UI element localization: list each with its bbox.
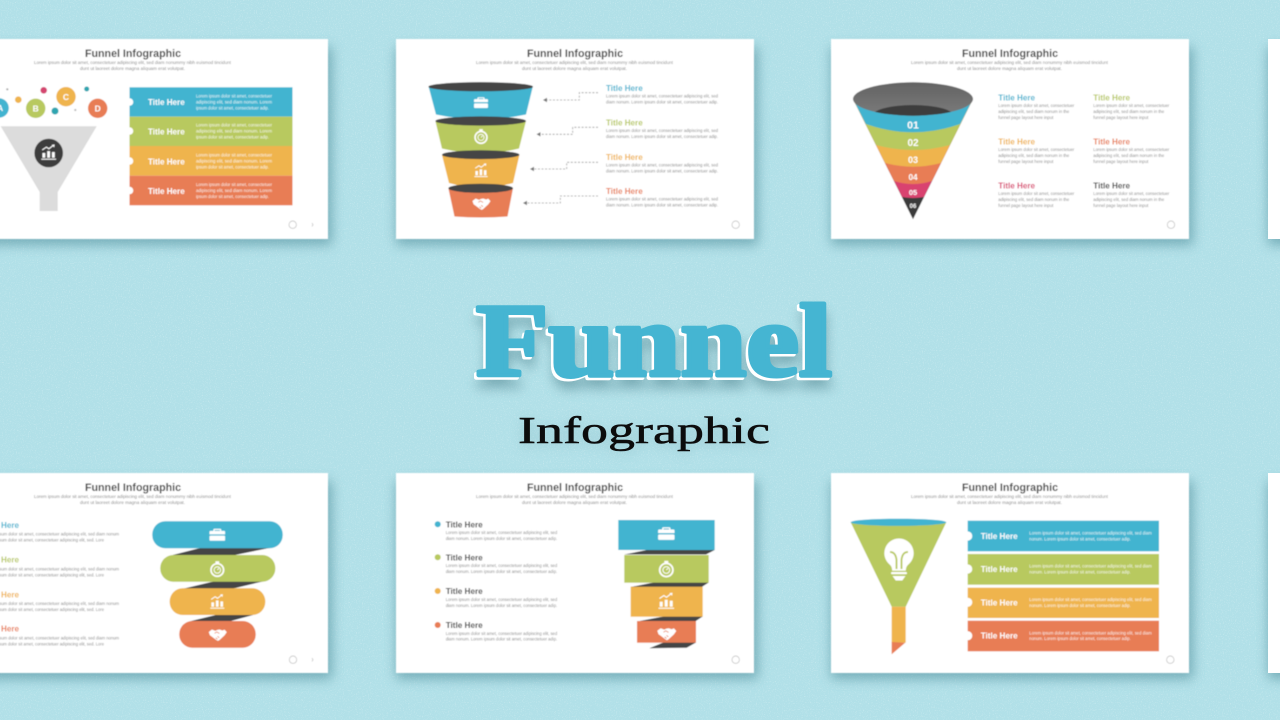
panel: slide 2 stacked funnel with arrows: Lorem ipsum dolor sit amet, consectetuer adipiscing elit, sed diam nonummy nibh euismod tincidunt — [476, 60, 674, 65]
bands: Lorem ipsum dolor sit amet, consectetuer — [196, 122, 273, 128]
letter balls: D — [95, 104, 101, 114]
bands: Lorem ipsum dolor sit amet, consectetuer adipiscing elit, sed diam — [1029, 630, 1152, 636]
bands: Title Here — [981, 564, 1018, 574]
text grid: adipiscing elit, sed diam nonum in the — [1093, 197, 1165, 202]
text grid: funnel page layout here input — [998, 115, 1054, 120]
icon: handshake — [209, 629, 227, 641]
text grid: funnel page layout here input — [998, 203, 1054, 208]
cone: 02 — [907, 138, 919, 149]
funnel segments — [428, 82, 533, 217]
icon: handshake — [657, 628, 676, 640]
bands: adipiscing elit, sed diam nonum. Lorem — [196, 158, 272, 164]
icon: chart in dark circle — [34, 139, 63, 167]
icon: briefcase — [210, 529, 225, 541]
panel: slide 4 pill funnel — [0, 473, 328, 673]
text rows: Title Here — [606, 118, 643, 128]
bands: Lorem ipsum dolor sit amet, consectetuer — [196, 94, 273, 98]
panel: slide 1 funnel with letter balls: Lorem ipsum dolor sit amet, consectetuer adipiscing elit, sed diam nonummy nibh euismod tincidunt — [34, 60, 232, 65]
bands: Lorem ipsum dolor sit amet, consectetuer adipiscing elit, sed diam — [1029, 530, 1152, 536]
icon: chart — [658, 593, 674, 609]
heading: Funnel Infographic: Infographic — [518, 413, 771, 455]
text rows with bullets: Title Here — [446, 586, 483, 596]
bands: ipsum dolor sit amet, consectetuer adip. — [196, 164, 269, 170]
arrows — [523, 93, 598, 205]
text grid: adipiscing elit, sed diam nonum in the — [998, 109, 1070, 114]
bands: adipiscing elit, sed diam nonum. Lorem — [196, 128, 272, 134]
icon: stopwatch — [475, 129, 487, 143]
text rows with bullets: Lorem ipsum dolor sit amet, consectetuer adipiscing elit, sed — [446, 631, 558, 636]
text rows: Lorem ipsum dolor sit amet, consectetuer adipiscing elit, sed — [606, 162, 719, 168]
panel: slide 5 ribbon funnel: Lorem ipsum dolor sit amet, consectetuer adipiscing elit, sed diam nonummy nibh euismod tincidunt — [476, 494, 674, 499]
text grid: Lorem ipsum dolor sit amet, consectetuer — [998, 147, 1075, 152]
icon: page number — [732, 221, 739, 228]
text grid: funnel page layout here input — [1093, 159, 1149, 164]
panel: slide 6 bulb funnel — [831, 473, 1189, 673]
text rows with bullets: diam nonum. Lorem ipsum dolor sit amet, consectetuer adip. — [446, 569, 557, 574]
panel: slide 5 ribbon funnel — [396, 473, 754, 673]
cone: 05 — [909, 188, 917, 197]
panel: cropped slide right bottom — [1268, 473, 1280, 673]
text rows: diam nonum. Lorem ipsum dolor sit amet, consectetuer adip. — [606, 202, 718, 208]
text rows: Lorem ipsum dolor sit amet, consectetuer adipiscing elit, sed — [606, 196, 719, 202]
panel: slide 5 ribbon funnel: Funnel Infographic — [527, 482, 623, 494]
bands: nonum. Lorem ipsum dolor sit amet, consectetuer adip. — [1029, 636, 1131, 641]
cone: 03 — [908, 155, 918, 165]
panel: slide 6 bulb funnel: Lorem ipsum dolor sit amet, consectetuer adipiscing elit, sed diam nonummy nibh euismod tincidunt — [911, 494, 1109, 499]
text rows: diam nonum. Lorem ipsum dolor sit amet, consectetuer adip. — [606, 100, 718, 104]
bands: Title Here — [148, 97, 185, 107]
icon: page number — [289, 656, 313, 663]
text rows — [606, 83, 719, 208]
text grid: Title Here — [998, 92, 1035, 102]
text grid: funnel page layout here input — [1093, 203, 1149, 208]
letter balls: B — [33, 104, 39, 114]
bands: nonum. Lorem ipsum dolor sit amet, consectetuer adip. — [1029, 603, 1131, 608]
text grid: Lorem ipsum dolor sit amet, consectetuer — [1093, 103, 1170, 108]
panel: slide 3 numbered cone: dunt ut laoreet dolore magna aliquam erat volutpat. — [957, 66, 1062, 71]
icon: briefcase — [474, 97, 488, 108]
bands: Lorem ipsum dolor sit amet, consectetuer adipiscing elit, sed diam — [1029, 564, 1152, 568]
text grid: Title Here — [1093, 92, 1130, 102]
bands: nonum. Lorem ipsum dolor sit amet, consectetuer adip. — [1029, 570, 1131, 574]
icon: briefcase — [658, 527, 674, 540]
panel: slide 2 stacked funnel with arrows: Funnel Infographic — [527, 48, 623, 60]
bands: Title Here — [148, 186, 185, 196]
text rows with bullets: Lorem ipsum dolor sit amet, consectetuer adipiscing elit, sed — [446, 530, 558, 535]
text rows — [0, 520, 119, 646]
icon: chart — [210, 594, 224, 609]
panel: slide 3 numbered cone — [831, 39, 1189, 239]
icon: handshake — [472, 198, 490, 210]
icon: page number — [1167, 656, 1174, 663]
bands: nonum. Lorem ipsum dolor sit amet, consectetuer adip. — [1029, 536, 1131, 542]
bands: Title Here — [148, 156, 185, 166]
text rows with bullets: Title Here — [446, 519, 483, 529]
panel: slide 5 ribbon funnel: dunt ut laoreet dolore magna aliquam erat volutpat. — [522, 500, 627, 505]
text grid: Lorem ipsum dolor sit amet, consectetuer — [1093, 147, 1170, 152]
panel: slide 1 funnel with letter balls: dunt ut laoreet dolore magna aliquam erat volutpat. — [80, 66, 185, 71]
heading: Funnel Infographic: Funnel — [474, 286, 830, 401]
text grid: funnel page layout here input — [1093, 115, 1149, 120]
icon: light bulb — [884, 538, 914, 580]
panel: slide 2 stacked funnel with arrows — [396, 39, 754, 239]
panel: slide 1 funnel with letter balls — [0, 39, 328, 239]
text grid: Title Here — [1093, 180, 1130, 190]
panel: slide 3 numbered cone: Lorem ipsum dolor sit amet, consectetuer adipiscing elit, sed diam nonummy nibh euismod tincidunt — [911, 60, 1109, 65]
cone: 01 — [907, 120, 919, 132]
bands: ipsum dolor sit amet, consectetuer adip. — [196, 194, 269, 199]
heading: Funnel Infographic: Infographic — [518, 410, 770, 452]
panel: slide 6 bulb funnel: Funnel Infographic — [962, 482, 1058, 494]
bands: Lorem ipsum dolor sit amet, consectetuer — [196, 152, 273, 158]
panel: slide 4 pill funnel: dunt ut laoreet dolore magna aliquam erat volutpat. — [80, 500, 185, 505]
text rows with bullets: diam nonum. Lorem ipsum dolor sit amet, consectetuer adip. — [446, 603, 557, 608]
panel: slide 4 pill funnel: Funnel Infographic — [85, 482, 181, 494]
text grid: adipiscing elit, sed diam nonum in the — [1093, 153, 1165, 158]
text rows: Lorem ipsum dolor sit amet, consectetuer adipiscing elit, sed — [606, 128, 719, 133]
text rows with bullets: diam nonum. Lorem ipsum dolor sit amet, consectetuer adip. — [446, 636, 557, 642]
text grid: adipiscing elit, sed diam nonum in the — [998, 197, 1070, 202]
heading: Funnel Infographic — [474, 284, 832, 455]
heading: Funnel Infographic: Funnel — [476, 284, 832, 398]
cone: 04 — [908, 173, 918, 182]
bands: Title Here — [981, 531, 1018, 541]
text grid: adipiscing elit, sed diam nonum in the — [1093, 109, 1165, 114]
bands: Lorem ipsum dolor sit amet, consectetuer adipiscing elit, sed diam — [1029, 597, 1152, 602]
bands: adipiscing elit, sed diam nonum. Lorem — [196, 188, 272, 193]
text rows: Lorem ipsum dolor sit amet, consectetuer adipiscing elit, sed — [606, 94, 719, 98]
text grid: Title Here — [998, 180, 1035, 190]
text rows with bullets: Lorem ipsum dolor sit amet, consectetuer adipiscing elit, sed — [446, 597, 558, 602]
text rows with bullets: Lorem ipsum dolor sit amet, consectetuer adipiscing elit, sed — [446, 563, 558, 568]
bands: Title Here — [148, 126, 185, 136]
cone: 06 — [910, 204, 917, 210]
letter balls: C — [63, 92, 69, 102]
icon: page number — [289, 221, 313, 228]
text grid: adipiscing elit, sed diam nonum in the — [998, 153, 1070, 158]
text grid — [998, 92, 1170, 208]
icon: page number — [1167, 221, 1175, 228]
bands: adipiscing elit, sed diam nonum. Lorem — [196, 100, 272, 104]
text rows with bullets: Title Here — [446, 620, 483, 630]
bands: Lorem ipsum dolor sit amet, consectetuer — [196, 182, 273, 187]
funnel shape — [1, 126, 97, 211]
panel: cropped slide right top — [1268, 39, 1280, 239]
icon: stopwatch — [660, 561, 673, 577]
pills — [152, 521, 283, 648]
text rows with bullets: diam nonum. Lorem ipsum dolor sit amet, consectetuer adip. — [446, 536, 557, 541]
panel: slide 2 stacked funnel with arrows: dunt ut laoreet dolore magna aliquam erat volutpat. — [522, 66, 627, 71]
bands — [126, 87, 292, 205]
text grid: Lorem ipsum dolor sit amet, consectetuer — [998, 191, 1075, 196]
text grid: Lorem ipsum dolor sit amet, consectetuer — [998, 103, 1075, 108]
text rows: Title Here — [606, 83, 643, 93]
panel: slide 6 bulb funnel: dunt ut laoreet dolore magna aliquam erat volutpat. — [957, 500, 1062, 505]
icon: stopwatch — [211, 561, 224, 576]
text grid: funnel page layout here input — [998, 159, 1054, 164]
bands: Title Here — [981, 597, 1018, 607]
bands — [963, 521, 1159, 651]
icon: page number — [732, 656, 739, 663]
text grid: Lorem ipsum dolor sit amet, consectetuer — [1093, 191, 1170, 196]
bands: ipsum dolor sit amet, consectetuer adip. — [196, 106, 269, 110]
bands: Title Here — [981, 631, 1018, 641]
text rows: diam nonum. Lorem ipsum dolor sit amet, consectetuer adip. — [606, 134, 718, 139]
heading: Funnel Infographic: Funnel — [476, 294, 832, 409]
funnel — [851, 519, 946, 654]
panel: slide 4 pill funnel: Lorem ipsum dolor sit amet, consectetuer adipiscing elit, sed diam nonummy nibh euismod tincidunt — [34, 494, 232, 499]
panel: slide 3 numbered cone: Funnel Infographic — [962, 48, 1058, 60]
cone — [853, 82, 973, 219]
text rows: Title Here — [606, 152, 643, 162]
icon: chart — [474, 163, 488, 177]
bands: ipsum dolor sit amet, consectetuer adip. — [196, 134, 269, 140]
text grid: Title Here — [1093, 136, 1130, 146]
panel: slide 1 funnel with letter balls: Funnel Infographic — [85, 48, 181, 60]
text rows with bullets: Title Here — [446, 552, 483, 562]
text grid: Title Here — [998, 136, 1035, 146]
text rows with bullets — [435, 519, 558, 642]
letter balls — [0, 86, 107, 118]
ribbon blocks — [618, 520, 715, 648]
text rows: Title Here — [606, 186, 643, 196]
text rows: diam nonum. Lorem ipsum dolor sit amet, consectetuer adip. — [606, 168, 718, 174]
